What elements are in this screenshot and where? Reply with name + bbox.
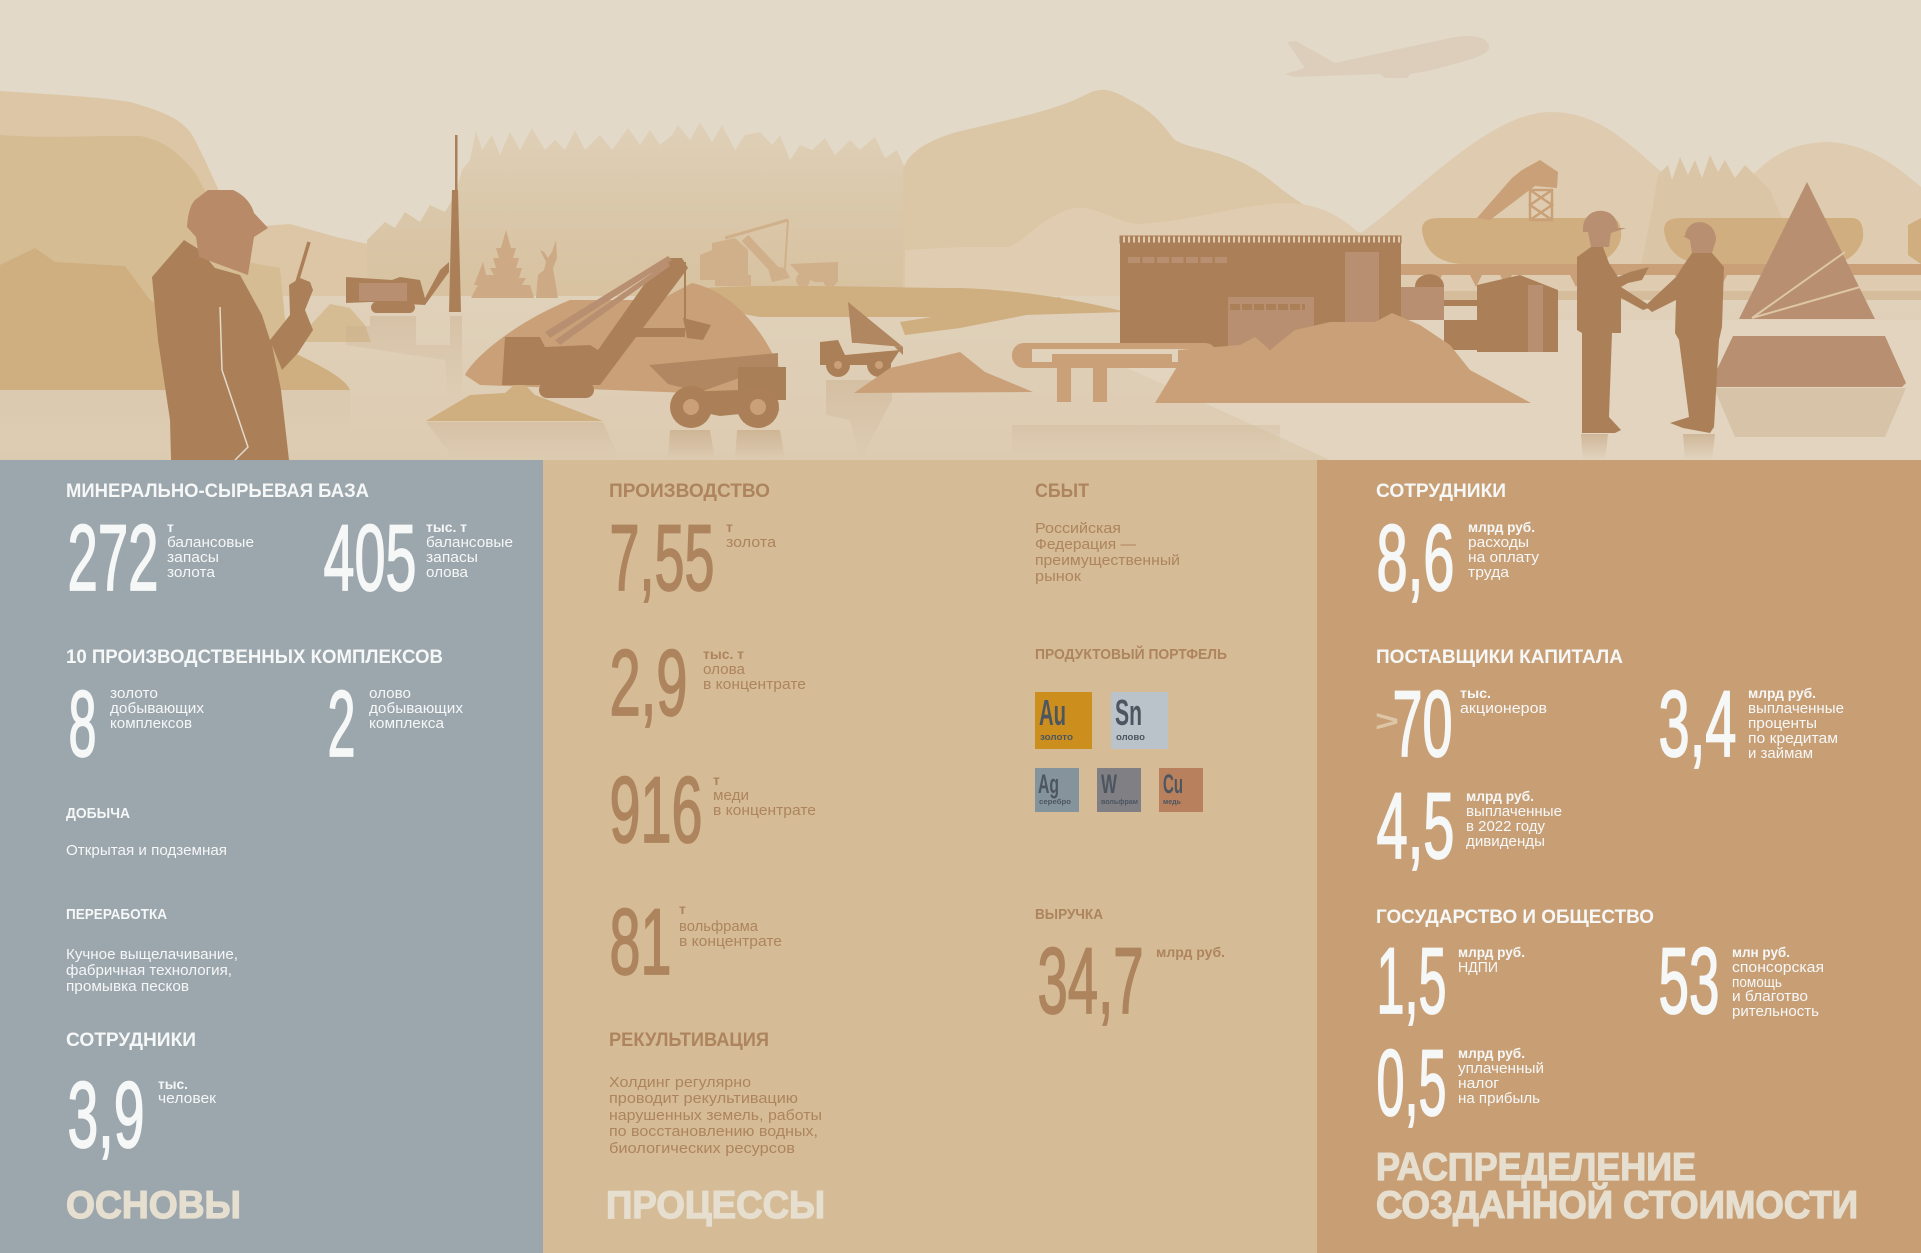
element tile: W: вольфрам — [1101, 799, 1138, 806]
ingot block — [1712, 336, 1906, 387]
stat: 8 комплексов: комплексов — [110, 715, 192, 732]
ingot reflection — [1714, 388, 1906, 437]
forest — [367, 122, 940, 310]
text block: рекультивация: по восстановлению водных, — [609, 1123, 818, 1140]
section title: распределение созданной стоимости: РАСПРЕДЕЛЕНИЕ — [1376, 1146, 1696, 1189]
stat: 405 тыс. т: олова — [426, 564, 469, 581]
stat: 1,5 млрд руб.: 1,5 — [1376, 928, 1446, 1033]
stat: 8 комплексов: добывающих — [110, 700, 204, 717]
heading: государство и общество: ГОСУДАРСТВО И ОБЩЕСТВО — [1376, 907, 1654, 928]
stat: 8,6 млрд руб.: 8,6 — [1376, 505, 1454, 610]
text block: сбыт: Федерация — — [1035, 536, 1136, 553]
small mound — [854, 352, 1033, 393]
stat: 8 комплексов — [68, 671, 204, 776]
stat: 3,9 тыс. человек: человек — [158, 1090, 216, 1107]
stat: 2,9 тыс. т олова — [610, 630, 806, 735]
left hills reflection — [0, 390, 350, 440]
element tile: Au: золото — [1040, 732, 1074, 742]
element tile: Sn — [1111, 692, 1168, 749]
stat: 8,6 млрд руб.: труда — [1468, 564, 1510, 581]
text block: сбыт — [1035, 520, 1180, 585]
stat: 3,9 тыс. человек: 3,9 — [68, 1062, 144, 1167]
stat: выручка 34,7 млрд руб.: 34,7 — [1038, 928, 1144, 1033]
block: переработка: ПЕРЕРАБОТКА — [66, 906, 167, 923]
stat: 405 тыс. т: запасы — [426, 549, 478, 566]
processing plant — [1120, 236, 1558, 363]
text block: рекультивация: Холдинг регулярно — [609, 1074, 751, 1091]
stat: более 70 тыс. акционеров — [1375, 671, 1547, 776]
conveyor reflection — [1012, 425, 1280, 455]
stat: 3,4 млрд руб.: по кредитам — [1748, 730, 1838, 747]
stat: 1,5 млрд руб.: млрд руб. — [1458, 944, 1525, 960]
ground — [0, 296, 1921, 460]
stat: 0,5 млрд руб.: налог — [1458, 1075, 1500, 1092]
stat: 2,9 тыс. т олова: тыс. т — [703, 646, 744, 662]
heading: сбыт: СБЫТ — [1035, 481, 1089, 502]
element tile: Au: Au — [1039, 692, 1066, 733]
section title: распределение созданной стоимости — [1376, 1146, 1858, 1227]
stat: 3,4 млрд руб.: млрд руб. — [1748, 685, 1816, 701]
stat: 2 комплекса: 2 — [328, 671, 356, 776]
stat: 8,6 млрд руб.: млрд руб. — [1468, 519, 1535, 535]
panel: основы — [0, 460, 543, 1253]
stat: 2,9 тыс. т олова: в концентрате — [703, 676, 806, 693]
stat: 3,9 тыс. человек: тыс. — [158, 1076, 188, 1092]
heading: сотрудники: СОТРУДНИКИ — [66, 1030, 196, 1051]
element tile: Cu — [1159, 768, 1203, 812]
truck reflection — [668, 430, 785, 460]
heading: рекультивация: РЕКУЛЬТИВАЦИЯ — [609, 1030, 769, 1051]
stat: более 70 тыс. акционеров: 70 — [1392, 671, 1452, 776]
heading: продуктовый портфель: ПРОДУКТОВЫЙ ПОРТФЕЛЬ — [1035, 645, 1227, 663]
stat: 53 млн руб.: 53 — [1658, 928, 1720, 1033]
stat: 7,55 т золота: т — [726, 519, 733, 535]
heap reflection — [426, 422, 620, 460]
heading: сотрудники: СОТРУДНИКИ — [1376, 481, 1506, 502]
heading: поставщики капитала: ПОСТАВЩИКИ КАПИТАЛА — [1376, 647, 1623, 668]
stat: 4,5 млрд руб.: млрд руб. — [1466, 788, 1534, 804]
panel: процессы — [543, 460, 1317, 1253]
stat: 916 т меди: в концентрате — [713, 802, 816, 819]
stat: 272 т: золота — [167, 564, 216, 581]
large excavator — [502, 256, 711, 398]
stat: 916 т меди: 916 — [610, 757, 702, 862]
section title: распределение созданной стоимости: СОЗДАННОЙ СТОИМОСТИ — [1376, 1182, 1858, 1227]
heading: производство: ПРОИЗВОДСТВО — [609, 481, 770, 502]
far forest right — [1640, 155, 1795, 270]
element tile: Sn: олово — [1116, 732, 1146, 742]
stat: более 70 тыс. акционеров: тыс. — [1460, 685, 1491, 701]
text block: сбыт: рынок — [1035, 568, 1081, 585]
stat: 81 т вольфрама: в концентрате — [679, 933, 782, 950]
element tile: Sn: Sn — [1115, 692, 1142, 733]
stat: 4,5 млрд руб.: 4,5 — [1376, 773, 1454, 878]
stat: 8 комплексов: золото — [110, 685, 158, 702]
section title: процессы: ПРОЦЕССЫ — [606, 1184, 825, 1227]
element tile: W: W — [1101, 769, 1117, 799]
heading: выручка: ВЫРУЧКА — [1035, 906, 1103, 923]
stat: 3,4 млрд руб.: проценты — [1748, 715, 1817, 732]
text block: рекультивация: нарушенных земель, работы — [609, 1107, 822, 1124]
block: добыча — [66, 805, 227, 859]
heading: минерально-сырьевая база: МИНЕРАЛЬНО-СЫРЬЕВАЯ БАЗА — [66, 481, 369, 502]
stat: 4,5 млрд руб.: в 2022 году — [1466, 818, 1545, 835]
element tile: Ag: Ag — [1038, 769, 1059, 799]
far excavator — [700, 220, 790, 286]
block: добыча: ДОБЫЧА — [66, 805, 130, 822]
stat: 81 т вольфрама: т — [679, 901, 686, 917]
far dump truck — [790, 262, 838, 287]
stat: 1,5 млрд руб.: НДПИ — [1458, 959, 1498, 976]
stat: 53 млн руб.: рительность — [1732, 1003, 1819, 1020]
stat: 0,5 млрд руб.: млрд руб. — [1458, 1045, 1525, 1061]
block: переработка — [66, 906, 238, 995]
miner with radio — [152, 190, 313, 460]
illustration: mining landscape — [0, 0, 1921, 460]
stat: 81 т вольфрама: 81 — [610, 889, 672, 994]
men shaking hands — [1577, 211, 1724, 433]
stat: 3,4 млрд руб.: и займам — [1748, 745, 1813, 762]
stat: 2 комплекса: добывающих — [369, 700, 463, 717]
ore loader — [1477, 160, 1558, 220]
top conveyor — [900, 297, 1062, 335]
stat: 2 комплекса: олово — [369, 685, 411, 702]
centre hills — [903, 90, 1361, 310]
stat: 272 т: балансовые — [167, 534, 254, 551]
stat: более 70 тыс. акционеров: акционеров — [1460, 700, 1547, 717]
stat: 3,4 млрд руб.: выплаченные — [1748, 700, 1844, 717]
stat: 0,5 млрд руб.: 0,5 — [1376, 1030, 1446, 1135]
stat: 916 т меди: меди — [713, 787, 749, 804]
element tile: Cu: медь — [1163, 799, 1182, 806]
stat: 7,55 т золота: 7,55 — [610, 505, 714, 610]
small truck reflection — [826, 380, 892, 460]
stat: более 70 тыс. акционеров: > — [1375, 705, 1399, 738]
stat: выручка 34,7 млрд руб.: млрд руб. — [1156, 944, 1225, 960]
stat: 405 тыс. т: 405 — [324, 505, 416, 610]
stat: 8 комплексов: 8 — [68, 671, 96, 776]
section title: основы: ОСНОВЫ — [66, 1184, 241, 1227]
stat: 405 тыс. т: тыс. т — [426, 519, 467, 535]
text block: рекультивация: проводит рекультивацию — [609, 1090, 798, 1107]
large sand heap — [1155, 313, 1531, 403]
stat: 53 млн руб.: и благотво — [1732, 988, 1808, 1005]
rail wagons — [1401, 218, 1921, 300]
front sand heap — [426, 380, 603, 421]
big ore mound — [465, 283, 781, 396]
large dump truck — [649, 353, 786, 428]
stat: 2 комплекса — [328, 671, 463, 776]
drill rig — [346, 135, 461, 313]
stat: 0,5 млрд руб.: уплаченный — [1458, 1060, 1544, 1077]
element tile: W — [1097, 768, 1141, 812]
pyramid of ore — [1739, 182, 1875, 319]
men reflections — [1581, 434, 1715, 460]
stat: 7,55 т золота: золота — [726, 534, 777, 551]
element tile: Ag — [1035, 768, 1079, 812]
stat: 81 т вольфрама — [610, 889, 782, 994]
text block: сбыт: Российская — [1035, 520, 1121, 537]
far right mountains — [1361, 112, 1921, 330]
stat: 4,5 млрд руб.: выплаченные — [1466, 803, 1562, 820]
heading: 10 производственных комплексов: 10 ПРОИЗВОДСТВЕННЫХ КОМПЛЕКСОВ — [66, 647, 443, 668]
stat: 405 тыс. т: балансовые — [426, 534, 513, 551]
airplane — [1285, 36, 1489, 78]
fir trees and deer — [471, 230, 558, 298]
stat: 2 комплекса: комплекса — [369, 715, 445, 732]
stat: 8,6 млрд руб.: расходы — [1468, 534, 1529, 551]
reflection of drill rig — [346, 316, 462, 400]
stat: 2,9 тыс. т олова: олова — [703, 661, 746, 678]
far quarry bench — [680, 286, 1125, 317]
block: переработка: промывка песков — [66, 978, 189, 995]
stat: 272 т: запасы — [167, 549, 219, 566]
pipe conveyor — [1012, 343, 1217, 402]
stat: 8,6 млрд руб.: на оплату — [1468, 549, 1540, 566]
stat: 2,9 тыс. т олова: 2,9 — [610, 630, 688, 735]
stat: 272 т: т — [167, 519, 174, 535]
block: переработка: Кучное выщелачивание, — [66, 946, 238, 963]
stat: 3,4 млрд руб.: 3,4 — [1658, 671, 1736, 776]
stat: 916 т меди: т — [713, 772, 720, 788]
stat: 53 млн руб.: помощь — [1732, 974, 1782, 991]
small dump truck — [820, 302, 903, 377]
stat: 4,5 млрд руб.: дивиденды — [1466, 833, 1545, 850]
stat: 81 т вольфрама: вольфрама — [679, 918, 759, 935]
text block: рекультивация: биологических ресурсов — [609, 1140, 795, 1157]
panel: распределение созданной стоимости — [1317, 460, 1921, 1253]
stat: 272 т: 272 — [68, 505, 158, 610]
stat: 53 млн руб. — [1658, 928, 1824, 1033]
lighter ground on the right — [1125, 320, 1921, 460]
left hills — [0, 135, 292, 390]
block: переработка: фабричная технология, — [66, 962, 232, 979]
element tile: Ag: серебро — [1039, 798, 1071, 806]
stat: 0,5 млрд руб.: на прибыль — [1458, 1090, 1540, 1107]
block: добыча: Открытая и подземная — [66, 842, 227, 859]
element tile: Au — [1035, 692, 1092, 749]
stat: 53 млн руб.: млн руб. — [1732, 944, 1790, 960]
stat: 53 млн руб.: спонсорская — [1732, 959, 1824, 976]
text block: рекультивация — [609, 1074, 822, 1157]
element tile: Cu: Cu — [1163, 769, 1183, 799]
text block: сбыт: преимущественный — [1035, 552, 1180, 569]
far left hill — [0, 91, 428, 392]
